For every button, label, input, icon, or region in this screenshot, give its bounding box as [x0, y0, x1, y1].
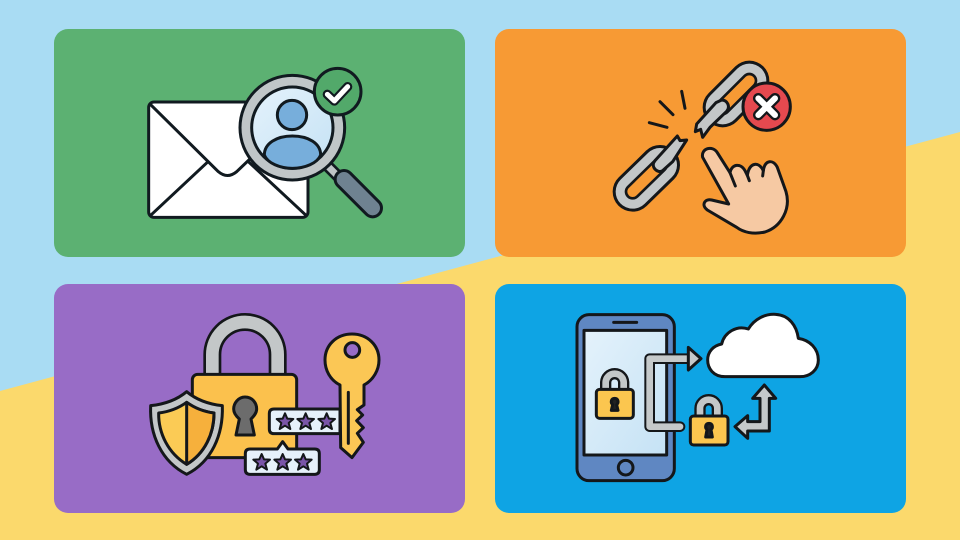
lock on phone screen: [596, 374, 633, 418]
upper broken stub: [695, 100, 728, 137]
panel: device and cloud security (blue): [495, 284, 906, 513]
smartphone: [577, 315, 674, 481]
spark lines: [649, 91, 685, 127]
hand pointer: [702, 148, 787, 233]
panel: email verification (green): [54, 29, 465, 257]
panel: passwords (purple): [54, 284, 465, 513]
shield: [151, 392, 222, 474]
padlock: [192, 322, 297, 458]
lower chain link: [633, 165, 660, 192]
badge: red X: [743, 83, 790, 130]
envelope: [149, 102, 308, 217]
cloud: [708, 314, 818, 377]
arrow: phone to cloud: [650, 347, 701, 427]
arrow: lock and cloud exchange: [735, 385, 776, 438]
magnifying glass: [240, 75, 373, 208]
person silhouette: [264, 100, 321, 168]
upper chain link: [723, 81, 749, 107]
panel: broken link (orange): [495, 29, 906, 257]
lower broken stub: [653, 136, 687, 171]
icon: padlock, shield, key and password fields: [151, 322, 379, 474]
password field one: [269, 409, 340, 434]
password field two: [245, 442, 319, 474]
badge: green check: [314, 68, 361, 115]
key: [325, 334, 379, 458]
icon: phone, cloud, locks and arrows: [577, 314, 818, 481]
lock beside phone: [690, 400, 728, 445]
icon: broken chain and pointing hand: [633, 81, 790, 233]
icon: envelope with magnifier: [149, 68, 373, 217]
